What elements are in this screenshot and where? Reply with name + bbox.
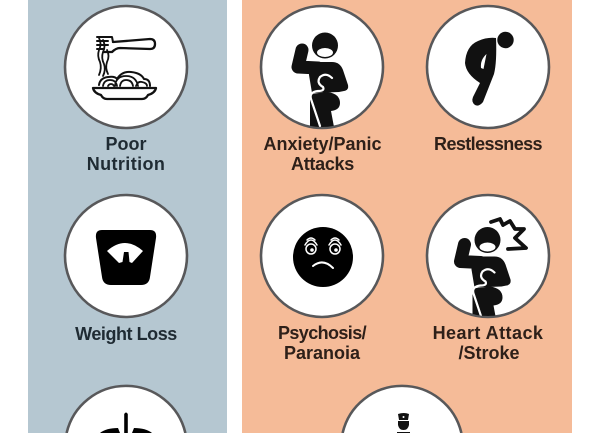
label: poor nutrition: Poor — [105, 134, 147, 154]
icon: worried face — [293, 227, 353, 287]
label: heart attack/stroke: Heart Attack — [433, 323, 544, 343]
item: anxiety / panic attacks — [261, 6, 383, 174]
label: restlessness: Restlessness — [434, 134, 543, 154]
item: psychosis / paranoia — [261, 195, 383, 363]
item: restlessness — [427, 6, 549, 154]
panel: orange column — [242, 0, 572, 433]
item: heart attack / stroke — [427, 195, 549, 363]
panel: blue column — [28, 0, 227, 433]
label: heart attack/stroke: /Stroke — [458, 343, 520, 363]
label: poor nutrition: Nutrition — [87, 154, 165, 174]
item: poor nutrition — [65, 6, 187, 174]
label: weight loss: Weight Loss — [75, 324, 177, 344]
label: anxiety/panic attacks — [263, 134, 382, 174]
label: psychosis/paranoia: Psychosis/ — [278, 323, 367, 343]
label: heart attack/stroke — [433, 323, 544, 363]
icon: officer — [397, 413, 410, 433]
item: weight loss — [65, 195, 187, 344]
item: police officer (cropped) — [343, 386, 461, 433]
icon: panicked figure — [298, 32, 348, 127]
icon: scale — [96, 230, 156, 285]
label: anxiety/panic attacks: Attacks — [291, 154, 354, 174]
label: poor nutrition — [87, 134, 165, 174]
label: anxiety/panic attacks: Anxiety/Panic — [263, 134, 382, 154]
icon: lungs — [100, 412, 152, 433]
icon: fork and noodles — [93, 37, 156, 99]
icon: hunched figure — [465, 32, 514, 106]
label: psychosis/paranoia: Paranoia — [284, 343, 361, 363]
item: lungs (cropped) — [67, 386, 185, 433]
icon: figure with burst — [460, 219, 526, 322]
label: psychosis/paranoia — [278, 323, 367, 363]
